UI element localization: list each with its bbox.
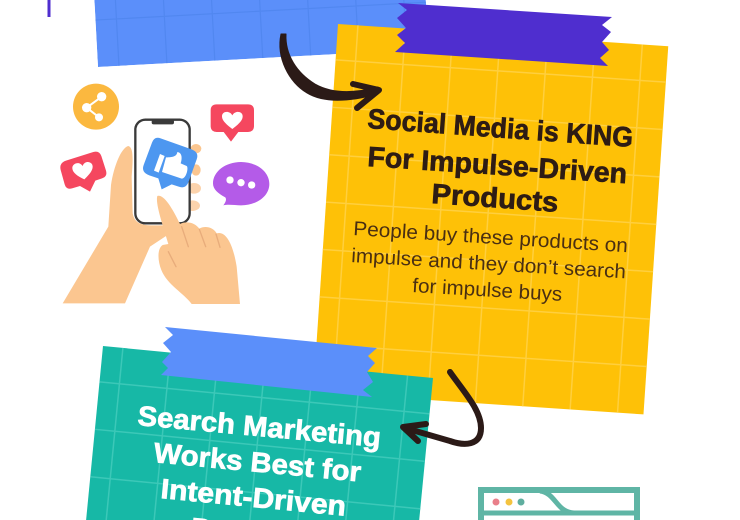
text block: impulse explanation: for impulse buys <box>412 275 563 306</box>
text block: impulse explanation: impulse and they don’t search <box>351 245 627 283</box>
purple tape <box>395 3 612 66</box>
heading: search marketing: Intent-Driven <box>159 473 348 520</box>
heading: social media is king: Products <box>431 178 559 218</box>
illustration: hands with phone and social icons <box>60 84 269 304</box>
panel: yellow note <box>313 24 668 414</box>
phone <box>135 120 190 223</box>
arrow: to search marketing note <box>403 372 481 444</box>
heading: search marketing: Search Marketing <box>136 400 382 453</box>
icon: thumbs up <box>143 138 197 189</box>
panel: green note <box>84 346 433 520</box>
heading: social media is king <box>367 103 634 218</box>
icon: heart bubble right <box>211 104 254 142</box>
right hand <box>157 196 240 304</box>
icon: heart bubble left <box>60 152 106 192</box>
icon: browser window <box>481 490 637 520</box>
icon: share <box>73 84 119 130</box>
panel: blue note <box>94 0 429 67</box>
left hand <box>63 146 170 303</box>
text block: impulse explanation <box>351 218 629 306</box>
blue tape <box>161 327 377 397</box>
icon: comment bubble <box>213 162 269 205</box>
heading: social media is king: For Impulse-Driven <box>367 141 628 189</box>
heading: search marketing: Works Best for <box>152 437 363 488</box>
purple tick mark <box>48 0 50 17</box>
heading: social media is king: Social Media is KING <box>367 103 634 153</box>
arrow: to social media note <box>280 34 379 108</box>
left hand fingers <box>185 144 201 211</box>
heading: search marketing <box>136 400 382 520</box>
text block: impulse explanation: People buy these products on <box>353 218 629 257</box>
